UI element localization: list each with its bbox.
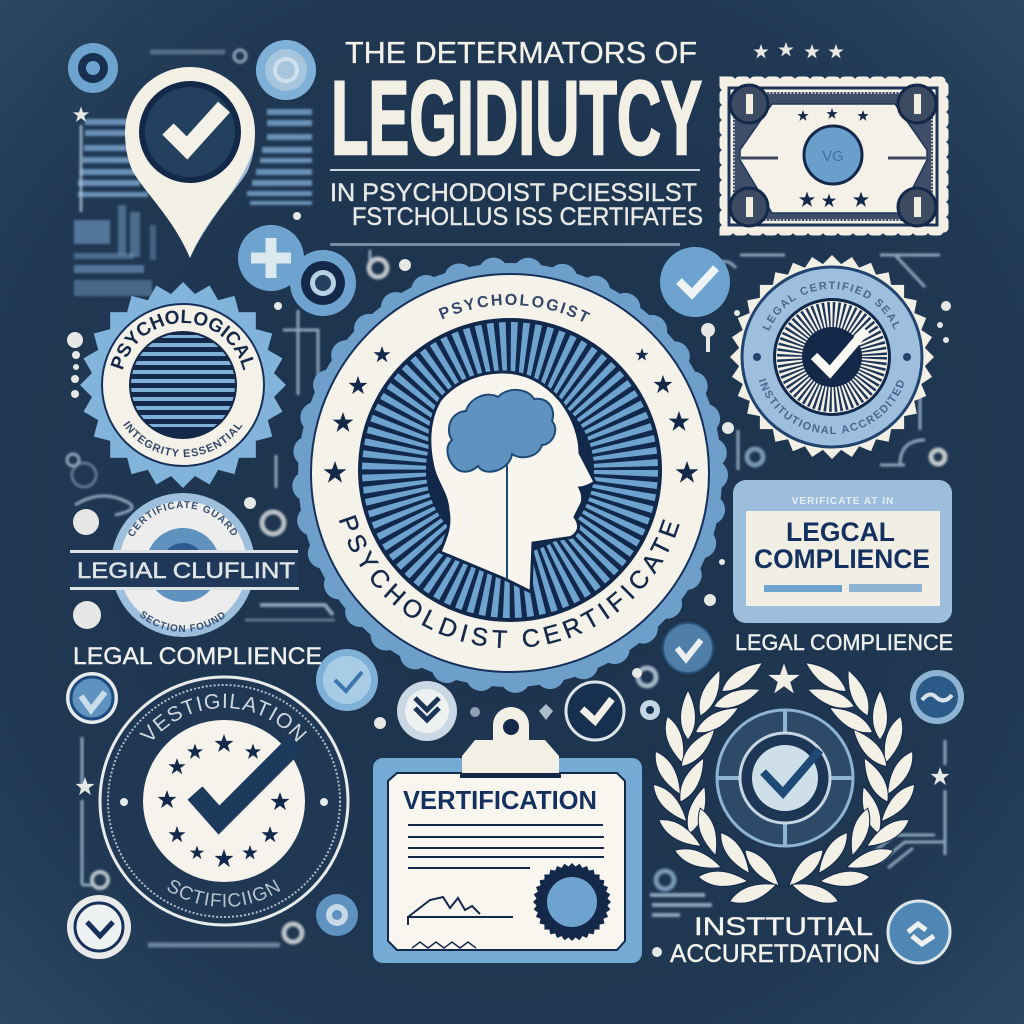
- title block: [330, 35, 703, 246]
- title line: the determators of: THE DETERMATORS OF: [345, 35, 697, 70]
- signature: [408, 897, 513, 925]
- verification stars: [158, 734, 290, 867]
- icon: scrap circle right: [910, 670, 964, 724]
- seal ring text top: LEGAL CERTIFIED SEAL: [762, 281, 900, 331]
- card small heading: VERIFICATE AT IN: [792, 496, 894, 507]
- seal: psychological: [80, 282, 286, 488]
- seal text bottom: INTEGRITY ESSENTIAL: [123, 420, 242, 458]
- verification check: [195, 742, 297, 820]
- verification certificate clipboard: [373, 707, 642, 963]
- head silhouette: [430, 372, 595, 592]
- subtitle line one: IN PSYCHODOIST PCIESSILST: [330, 179, 697, 207]
- stamp stars: [797, 108, 869, 207]
- seal: check mark: [730, 255, 934, 459]
- icon: check small right: [663, 623, 713, 673]
- striped disc: [130, 335, 236, 427]
- icon: plus circle: [238, 225, 304, 291]
- icon: check ring centre: [566, 682, 624, 740]
- title word: legidiutcy: LEGIDIUTCY: [331, 60, 702, 177]
- label: institutional accreditation: [670, 913, 880, 968]
- icon: target circle top left: [68, 43, 118, 93]
- legal compliance card: [733, 480, 952, 623]
- banner: legial cluflint: LEGIAL CLUFLINT: [77, 558, 295, 583]
- subtitle line two: FSTCHOLLUS ISS CERTIFATES: [352, 203, 703, 231]
- decorative stripes beside pin: [74, 109, 312, 296]
- seal top text: PSYCHOLOGIST: [438, 294, 590, 322]
- icon: check circle upper right: [660, 247, 730, 317]
- stamp inner panel: [740, 104, 927, 213]
- pin check mark: [168, 107, 224, 148]
- seal bottom microtext: SECTION FOUND: [140, 611, 225, 632]
- label: institutional accreditation: INSTTUTIAL: [694, 913, 873, 941]
- brain stem line: [506, 465, 508, 579]
- top stars: [753, 42, 844, 58]
- stamp corner rosettes: [730, 85, 936, 226]
- brain: [447, 390, 555, 472]
- icon: ring right of centre: [640, 700, 660, 720]
- label: institutional accreditation: ACCURETDATION: [670, 940, 880, 968]
- card title: VERTIFICATION: [403, 785, 597, 815]
- icon: target circle: [290, 250, 356, 316]
- icon: check outlined far left: [66, 672, 118, 724]
- label: legal compliance left: LEGAL COMPLIENCE: [73, 643, 322, 670]
- small doodles: [67, 50, 945, 945]
- certificate stamp: VG: [822, 148, 844, 165]
- clip: [462, 707, 559, 778]
- icon: check blue left: [316, 649, 378, 711]
- seal: legal behind banner: [112, 493, 254, 637]
- verification seal: [98, 676, 350, 926]
- certificate stamp: [724, 81, 944, 231]
- location pin with check: [125, 67, 255, 258]
- seal bottom text: SCTIFICIIGN: [168, 879, 280, 907]
- banner: legial cluflint: [70, 550, 299, 590]
- icon: double chevron circle: [397, 681, 457, 741]
- seal top text: VESTIGILATION: [139, 694, 307, 742]
- left branch: [648, 657, 785, 909]
- card heading line two: COMPLIENCE: [754, 544, 930, 574]
- main psychologist certificate seal: [292, 258, 728, 693]
- centre medallion: [717, 710, 853, 846]
- main seal stars: [324, 346, 698, 483]
- seal check: [814, 330, 866, 372]
- stamp centre medallion: [804, 126, 862, 184]
- seal top microtext: CERTIFICATE GUARD: [128, 501, 237, 536]
- laurel wreath accreditation emblem: [648, 657, 920, 909]
- icon: check bottom left: [67, 895, 131, 959]
- small dots: [67, 106, 951, 957]
- seal ring text bottom: INSTITUTIONAL ACCREDITED: [758, 378, 904, 434]
- star above wreath: [768, 664, 800, 693]
- right branch: [783, 657, 920, 909]
- seal bottom text: PSYCHOLDIST CERTIFICATE: [339, 515, 680, 648]
- label: legal compliance right: LEGAL COMPLIENCE: [735, 630, 953, 655]
- icon: blue circle bottom right: [888, 901, 950, 963]
- icon: swirl circle top: [256, 40, 316, 100]
- seal text top: PSYCHOLOGICAL: [110, 310, 254, 370]
- medallion check: [763, 750, 820, 793]
- icon: ring bottom: [316, 894, 358, 936]
- card heading line one: LEGCAL: [786, 517, 895, 547]
- certificate seal: [533, 863, 611, 941]
- radiating rays: [394, 354, 626, 586]
